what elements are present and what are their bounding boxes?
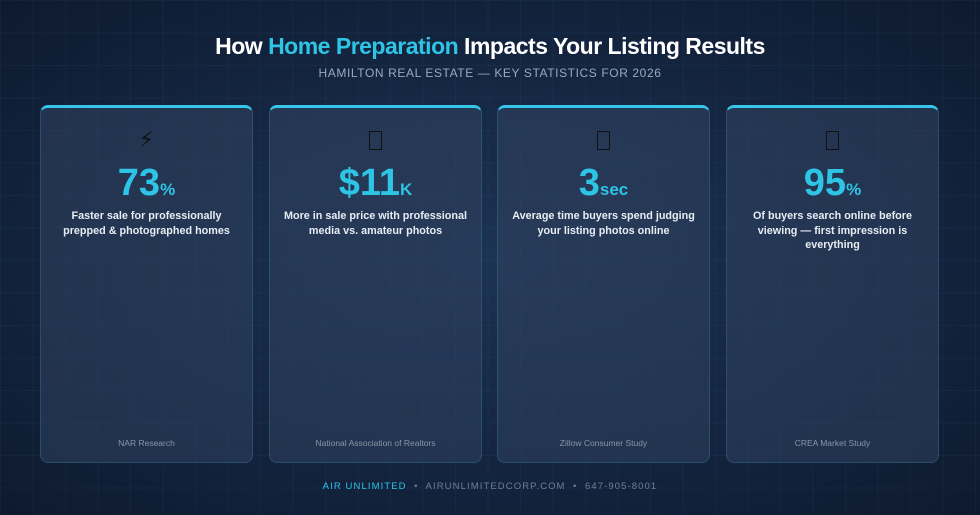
panel: 73% faster sale xyxy=(40,105,253,463)
description: Faster sale for professionally prepped & photographed homes xyxy=(63,210,230,236)
icon: placeholder box xyxy=(826,131,839,150)
panel: $11K more xyxy=(269,105,482,463)
icon: placeholder box xyxy=(597,131,610,150)
stat 3sec: 3sec xyxy=(579,162,628,204)
footer: AIR UNLIMITED • AIRUNLIMITEDCORP.COM • 647-905-8001 xyxy=(323,481,657,492)
panel: 3 sec xyxy=(497,105,710,463)
title: How Home Preparation Impacts Your Listing Results xyxy=(215,33,765,59)
description: More in sale price with professional media vs. amateur photos xyxy=(284,210,467,236)
description: Average time buyers spend judging your listing photos online xyxy=(512,210,695,236)
stat 95%: 95% xyxy=(804,162,861,204)
icon: placeholder box xyxy=(369,131,382,150)
source: Zillow Consumer Study xyxy=(560,438,647,448)
panel: 95% search online xyxy=(726,105,939,463)
description: Of buyers search online before viewing — first impression is everything xyxy=(753,210,912,251)
subtitle: HAMILTON REAL ESTATE — KEY STATISTICS FOR 2026 xyxy=(318,66,662,80)
source: NAR Research xyxy=(118,438,175,448)
source: National Association of Realtors xyxy=(315,438,436,448)
stat $11K: $11K xyxy=(339,162,412,204)
icon: lightning: ⚡︎ xyxy=(139,127,154,152)
source: CREA Market Study xyxy=(795,438,870,448)
stat 73%: 73% xyxy=(118,162,175,204)
